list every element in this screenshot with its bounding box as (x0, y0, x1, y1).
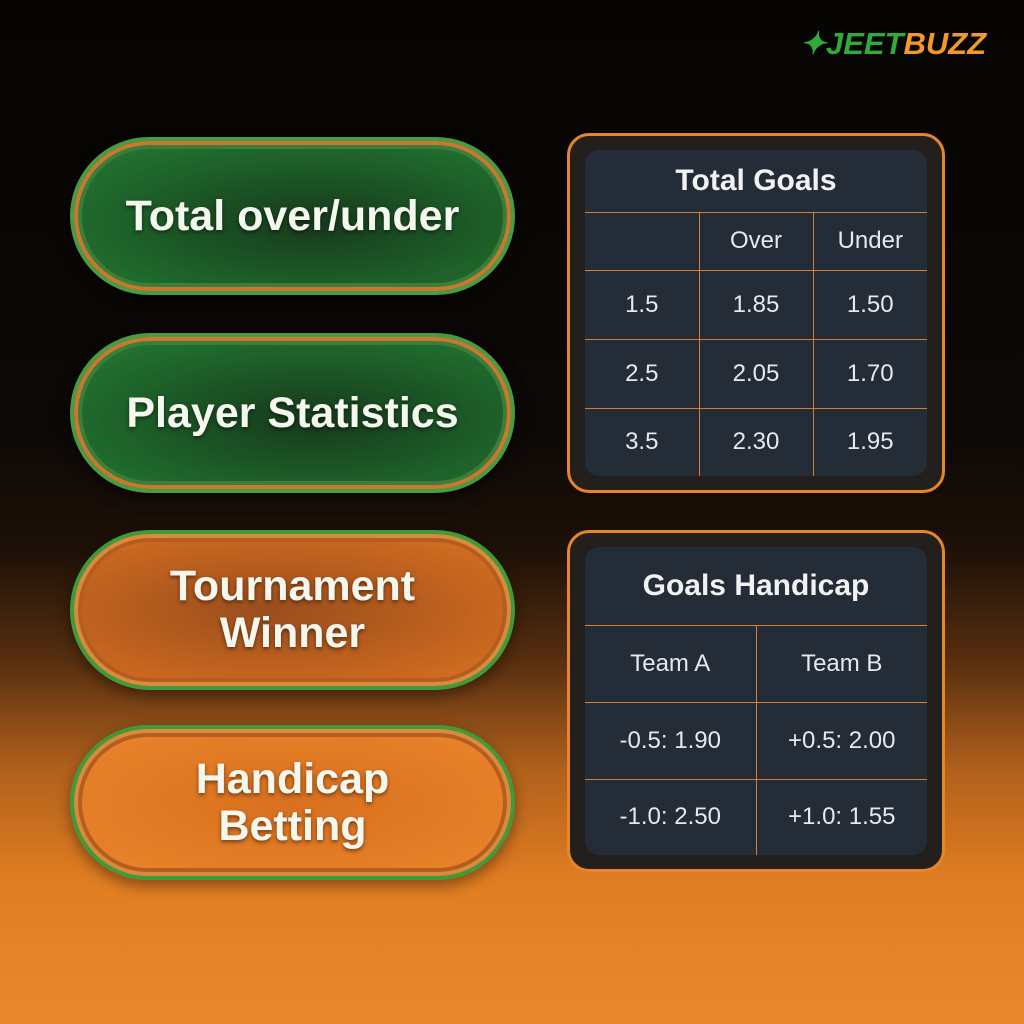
pill: Total over/under (70, 137, 515, 295)
pill: Player Statistics: Player Statistics (126, 388, 459, 436)
pill: Handicap Betting: Handicap (196, 754, 389, 802)
table: Total Goals: 1.85 (733, 291, 779, 318)
table: Total Goals: Over (730, 227, 782, 254)
pill: Tournament Winner: Tournament (170, 562, 415, 610)
pill: Tournament Winner (70, 530, 515, 690)
logo: ✦JEETBUZZ (800, 26, 986, 61)
pill: Total over/under: Total over/under (126, 192, 459, 240)
table: Total Goals: 2.05 (733, 360, 779, 387)
table: Total Goals: Total Goals (675, 164, 837, 197)
table: Goals Handicap: Team A (630, 650, 710, 677)
table: Goals Handicap: Goals Handicap (643, 569, 869, 602)
table: Goals Handicap: Team B (801, 650, 882, 677)
table: Goals Handicap (567, 530, 945, 872)
pill: Handicap Betting (70, 725, 515, 880)
table: Total Goals: Under (838, 227, 903, 254)
pill: Handicap Betting: Betting (218, 802, 367, 850)
table: Total Goals: 1.95 (847, 428, 894, 455)
pill: Tournament Winner: Winner (220, 609, 365, 657)
table: Total Goals: 1.5 (625, 291, 658, 318)
table: Total Goals: 2.5 (625, 360, 658, 387)
table: Goals Handicap: +1.0: 1.55 (788, 803, 895, 830)
table: Total Goals: 1.50 (847, 291, 894, 318)
table: Goals Handicap: -1.0: 2.50 (620, 803, 721, 830)
table: Total Goals: 3.5 (625, 428, 658, 455)
table: Total Goals: 2.30 (733, 428, 779, 455)
table: Goals Handicap: +0.5: 2.00 (788, 727, 895, 754)
table: Total Goals (567, 133, 945, 493)
pill: Player Statistics (70, 333, 515, 493)
table: Goals Handicap: -0.5: 1.90 (620, 727, 721, 754)
table: Total Goals: 1.70 (847, 360, 894, 387)
